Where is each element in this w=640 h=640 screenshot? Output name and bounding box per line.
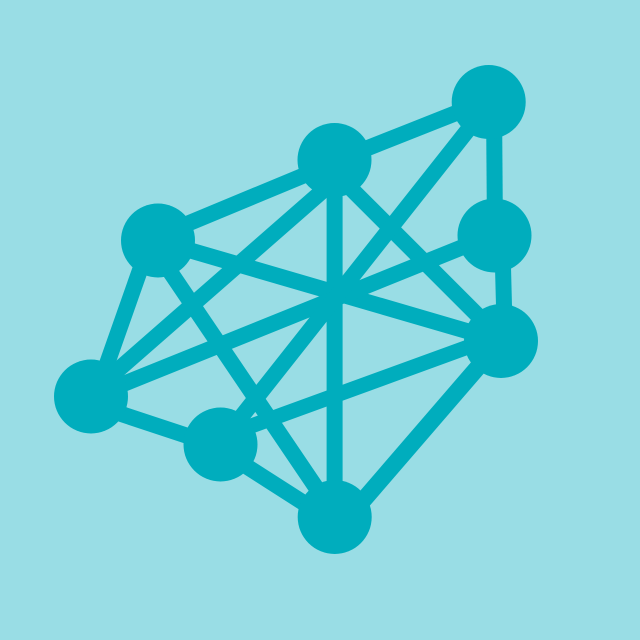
network nodes bbox=[54, 65, 538, 554]
network edges bbox=[91, 100, 505, 533]
